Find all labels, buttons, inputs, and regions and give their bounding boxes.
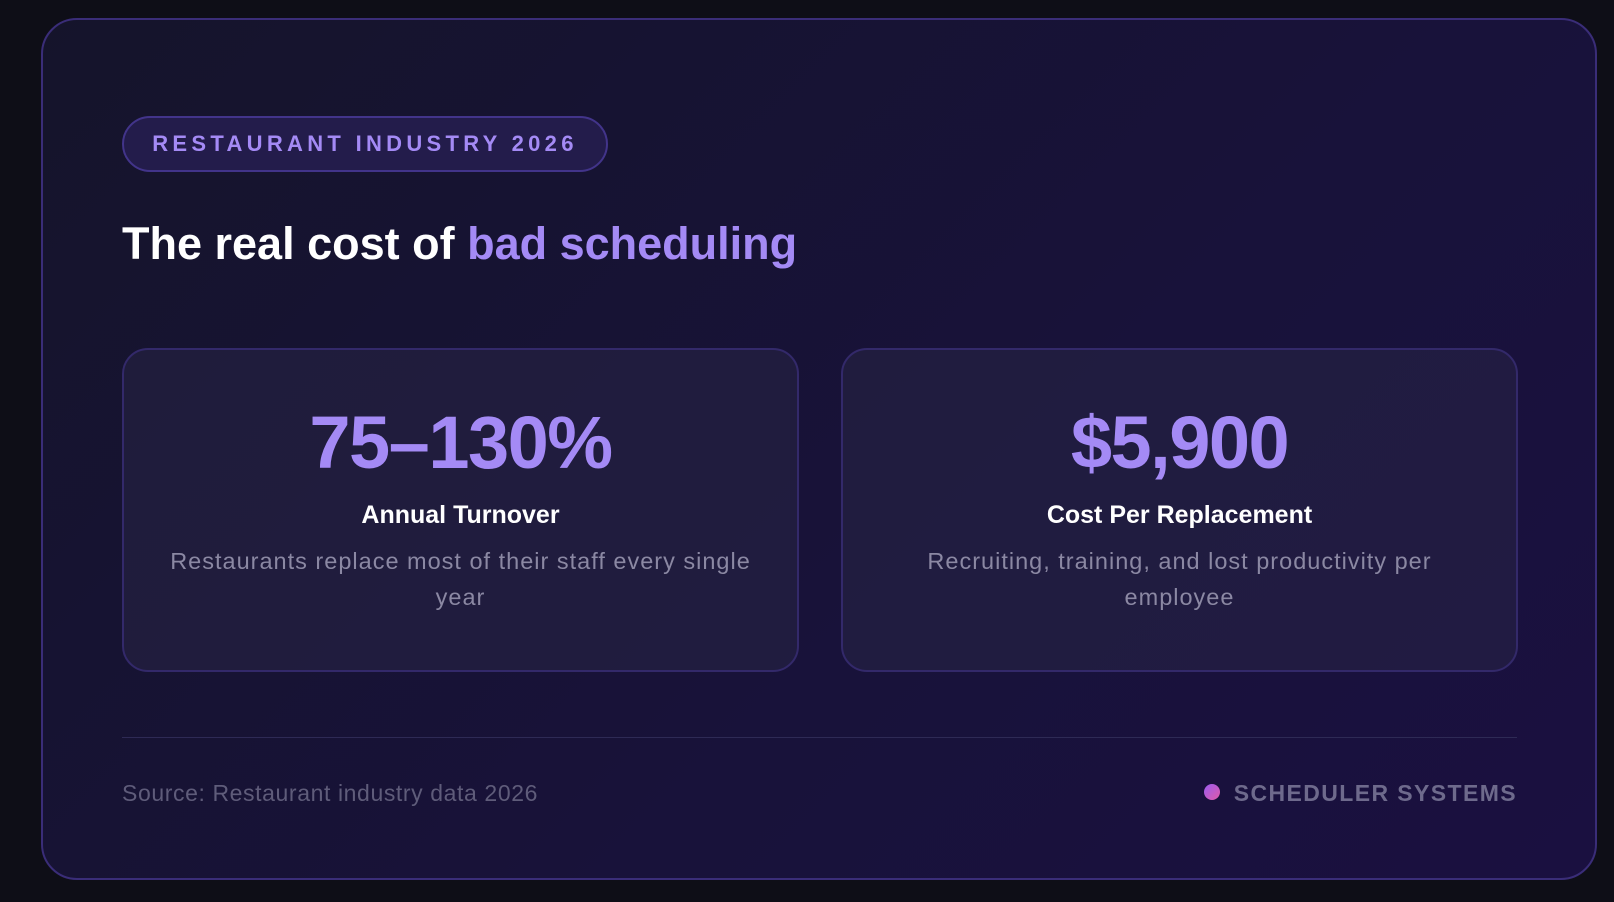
title: The real cost of bad scheduling [122,218,797,269]
description: turnover: Restaurants replace most of their staff every single year [170,548,751,610]
panel: cost per replacement [841,348,1518,672]
badge: restaurant industry 2026 [122,116,608,172]
label: annual turnover: Annual Turnover [361,501,560,529]
stat: 75-130%: 75–130% [309,401,612,484]
footer brand: SCHEDULER SYSTEMS [1234,780,1517,806]
badge: restaurant industry 2026: RESTAURANT INDUSTRY 2026 [152,131,578,156]
footer source: Source: Restaurant industry data 2026 [122,780,538,806]
label: cost per replacement: Cost Per Replacement [1047,501,1312,529]
stat: $5,900: $5,900 [1071,401,1288,484]
description: replacement: Recruiting, training, and lost productivity per employee [927,548,1432,610]
panel: annual turnover [122,348,799,672]
